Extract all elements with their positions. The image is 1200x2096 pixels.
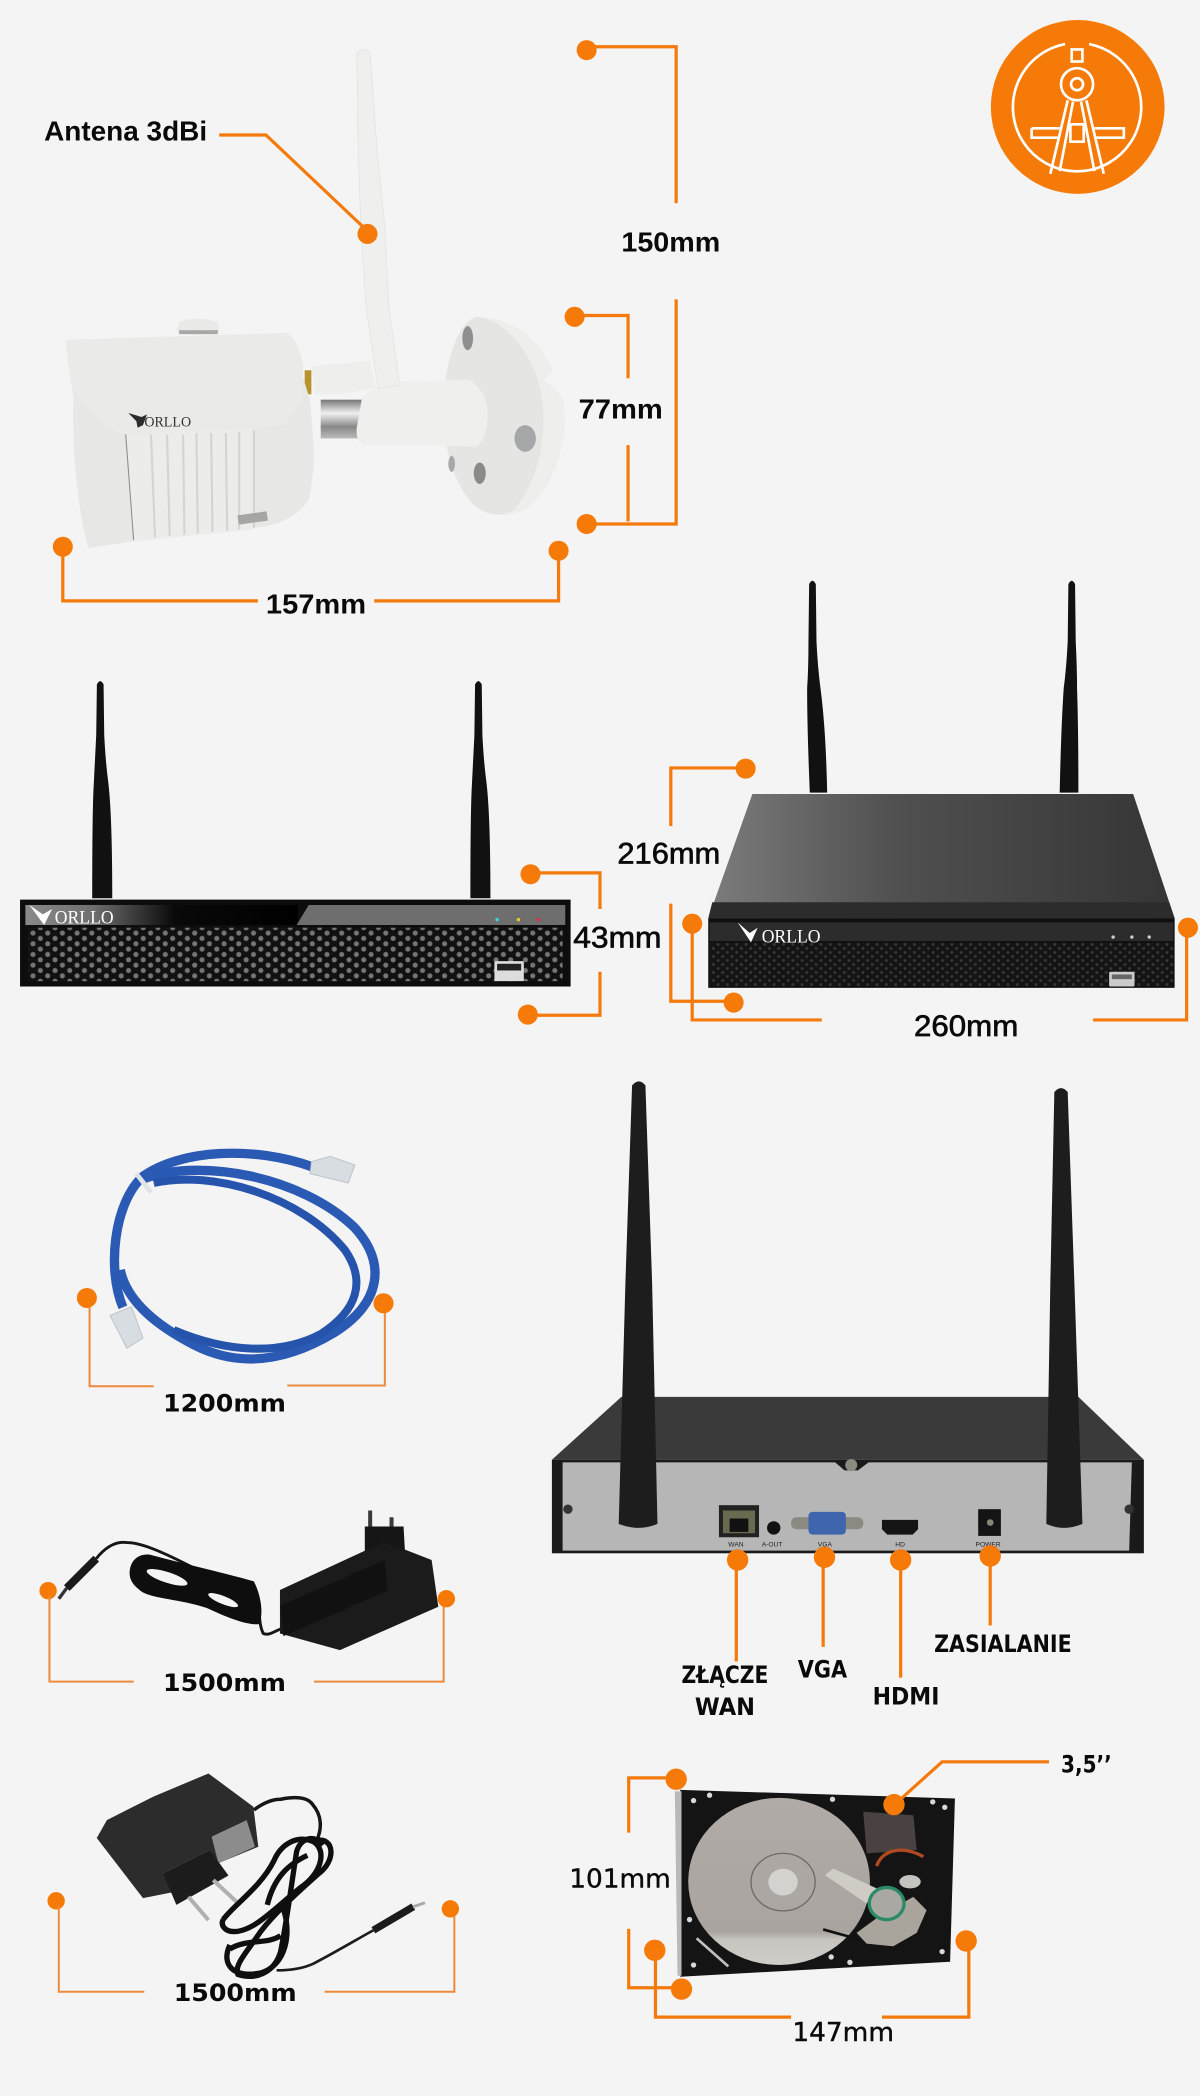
dimension: 147mm: 147mm [792, 2017, 894, 2047]
icon: WAN port [719, 1505, 759, 1537]
icon: logo wing [738, 922, 758, 942]
dimension: 101mm [569, 1768, 692, 2000]
callout: HDMI: HDMI [873, 1682, 939, 1710]
icon: screw [845, 1459, 857, 1471]
dimension: 150mm [577, 40, 720, 534]
front lip [708, 902, 1175, 918]
front panel right [297, 905, 565, 925]
icon: right antenna [1060, 581, 1078, 793]
icon: power port [978, 1509, 1001, 1536]
callout: power: ZASIALANIE [934, 1630, 1072, 1658]
icon: power adapter 1 [59, 1511, 438, 1650]
callout: 3,5 inch [883, 1751, 1112, 1815]
rear chassis [552, 1460, 1144, 1553]
callout: VGA [798, 1547, 848, 1684]
icon: USB port [1109, 972, 1135, 987]
port captions: VGA [818, 1542, 832, 1549]
callout: power [934, 1545, 1072, 1658]
top surface [708, 794, 1175, 918]
dimension: adapter 2 cable 1500mm [47, 1892, 459, 2007]
icon: camera arm and connector [305, 361, 488, 446]
icon: camera mount disc [444, 317, 565, 515]
icon: camera top gland [176, 319, 219, 334]
dimension: 147mm [644, 1930, 977, 2047]
dimension: 43mm: 43mm [573, 922, 661, 955]
dimension: 157mm: 157mm [266, 589, 366, 620]
dimension: adapter 1 cable 1500mm: 1500mm [163, 1669, 286, 1697]
dimension: 260mm [682, 914, 1198, 1043]
dimension: 150mm: 150mm [621, 226, 720, 257]
icon: camera body [65, 333, 314, 548]
panel: NVR rear view [552, 1081, 1144, 1553]
front chassis [708, 918, 1175, 988]
dimension: 1200mm [77, 1288, 394, 1418]
icon: left antenna [92, 681, 112, 898]
icon: right antenna [1046, 1088, 1082, 1528]
icon: audio out [767, 1521, 780, 1535]
LED indicators [1111, 935, 1151, 939]
LED indicators [495, 918, 540, 921]
icon: USB port [494, 961, 524, 981]
callout: WAN connector: ZŁĄCZE [682, 1661, 768, 1689]
dimension: 1200mm: 1200mm [163, 1390, 286, 1418]
dimension: 77mm: 77mm [579, 393, 663, 424]
icon: orange compass badge [991, 20, 1165, 194]
panel: camera product [65, 49, 565, 548]
callout: WAN connector [682, 1549, 768, 1721]
front panel [710, 922, 1173, 941]
callout: VGA: VGA [798, 1656, 848, 1684]
icon: HDMI port [882, 1520, 918, 1535]
panel: NVR front view [20, 681, 571, 987]
port captions: POWER [976, 1542, 1001, 1549]
mesh grille [28, 928, 563, 981]
icon: blue network cable [110, 1153, 375, 1359]
port captions [728, 1542, 1001, 1549]
mesh grille [710, 942, 1173, 987]
callout: WAN connector: WAN [695, 1693, 755, 1721]
icon: hard disk drive [675, 1790, 955, 1977]
icon: power adapter 2 [97, 1773, 425, 1976]
dimension: adapter 2 cable 1500mm: 1500mm [174, 1979, 297, 2007]
logo: ORLLO perspective: ORLLO [762, 926, 820, 947]
icon: left antenna [619, 1081, 657, 1528]
top surface [552, 1397, 1144, 1460]
dimension: 216mm: 216mm [617, 838, 720, 871]
rear plate [563, 1462, 1132, 1551]
logo: ORLLO front: ORLLO [55, 908, 114, 929]
callout: Antena 3dBi [44, 115, 378, 244]
port captions: WAN [728, 1542, 744, 1549]
dimension: 260mm: 260mm [914, 1010, 1018, 1043]
dimension: 43mm [518, 864, 661, 1025]
callout: Antena 3dBi: Antena 3dBi [44, 115, 207, 146]
callout: 3,5 inch: 3,5’’ [1061, 1751, 1112, 1779]
front chassis [20, 900, 571, 987]
panel: NVR perspective view [708, 581, 1175, 988]
icon: left antenna [807, 581, 827, 793]
dimension: 216mm [617, 759, 756, 1013]
side screws [563, 1504, 1134, 1514]
dimension: 77mm [565, 307, 663, 521]
front panel [25, 905, 298, 925]
port captions: HD [895, 1542, 905, 1549]
dimension: 157mm [53, 537, 569, 620]
port captions: A-OUT [762, 1542, 782, 1549]
icon: camera antenna [357, 49, 400, 389]
dimension: 101mm: 101mm [569, 1863, 671, 1893]
icon: right antenna [470, 681, 490, 898]
icon: logo wing [29, 905, 52, 925]
icon: VGA port [791, 1512, 863, 1535]
callout: HDMI [873, 1549, 939, 1710]
dimension: adapter 1 cable 1500mm [39, 1582, 455, 1697]
logo: ORLLO on camera: ORLLO [144, 414, 191, 430]
